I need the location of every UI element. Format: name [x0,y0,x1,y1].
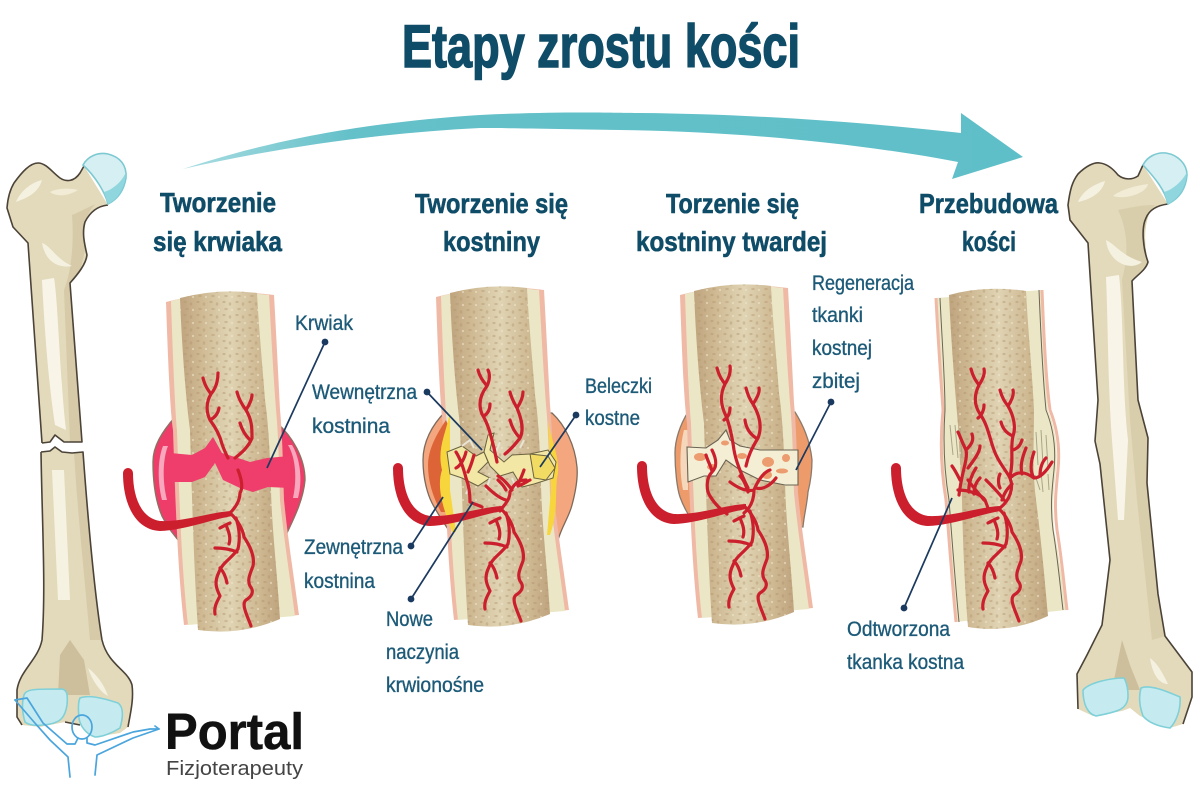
heading: stage 2 [415,188,568,257]
bone shaft [680,284,813,625]
leader: Wewnętrzna kostnina [424,389,482,450]
blood vessels [706,366,776,514]
lower vessels [891,463,1021,621]
panel: stage 4 remodeling [891,289,1067,629]
left condyle cap [1083,678,1128,716]
label: Regeneracja tkanki kostnej zbitej [812,272,914,393]
lower vessels [123,468,253,626]
label: Zewnętrzna kostnina [304,536,403,593]
heading: stage 2: Tworzenie się [415,188,568,219]
heading: stage 4: kości [962,226,1016,257]
blood vessels [203,373,252,513]
leader: Beleczki kostne [540,412,579,467]
logo figure icon [15,698,159,777]
blood vessels [456,370,530,511]
label: Krwiak: Krwiak [295,312,353,335]
leader: Zewnętrzna kostnina [408,497,443,549]
label: Beleczki kostne [585,375,652,430]
panel: stage 2 soft callus [393,286,577,627]
label: Nowe naczynia krwionośne: Nowe [386,608,433,631]
arrow: healing progression [183,112,1023,179]
heading: stage 4: Przebudowa [919,188,1058,219]
label: Zewnętrzna kostnina: Zewnętrzna [304,536,403,559]
callus bulge [423,412,577,540]
blood vessels [952,369,1052,510]
right condyle cap [78,697,122,737]
shaft and head [1068,163,1192,728]
bone shaft [436,286,569,627]
hematoma bulge [153,417,305,545]
femoral head cap [83,153,126,204]
upper fragment [7,163,108,443]
left femur: fractured bone [7,153,133,737]
panel: stage 3 hard callus [637,284,813,625]
heading: stage 3 [636,188,827,257]
periosteum outlines [936,290,1067,622]
leader: Nowe naczynia krwionośne [408,502,473,602]
heading: stage 1: się krwiaka [153,226,282,257]
logo subtitle: Fizjoterapeuty [166,758,303,780]
remodeling hatch marks [950,425,1049,492]
lower fragment [17,447,133,737]
label: Regeneracja tkanki kostnej zbitej: tkanki [812,304,863,327]
label: Beleczki kostne: Beleczki [585,375,652,398]
leader: Odtworzona tkanka kostna [901,498,952,611]
bone shaft [936,290,1066,622]
lower vessels [637,461,767,619]
callus highlight [680,430,688,490]
bone trabeculae [447,433,556,494]
right femur: healed bone [1068,153,1192,728]
right condyle cap [1140,687,1180,728]
logo wordmark: Portal [165,703,304,760]
label: Nowe naczynia krwionośne [386,608,484,697]
panel: stage 1 hematoma [123,291,305,632]
label: Nowe naczynia krwionośne: naczynia [386,641,459,664]
label: Regeneracja tkanki kostnej zbitej: kostnej [812,337,872,360]
label: Zewnętrzna kostnina: kostnina [304,570,375,593]
label: Regeneracja tkanki kostnej zbitej: Regeneracja [812,272,914,295]
bone shaft [166,291,299,632]
callus bulge [675,412,812,527]
heading: stage 1: Tworzenie [160,187,276,218]
label: Wewnętrzna kostnina [312,381,417,438]
logo: Portal Fizjoterapeuty [15,698,304,780]
label: Regeneracja tkanki kostnej zbitej: zbitej [812,370,860,393]
fracture blood clot [170,437,290,492]
femoral head cap [1143,153,1187,204]
label: Odtworzona tkanka kostna [847,618,964,674]
label: Odtworzona tkanka kostna: tkanka kostna [847,651,964,674]
heading: stage 3: kostniny twardej [636,226,827,257]
heading: stage 2: kostniny [443,226,540,257]
leader: Krwiak [267,339,328,468]
heading: stage 4 [919,188,1058,257]
label: Nowe naczynia krwionośne: krwionośne [386,674,484,697]
heading: stage 3: Torzenie się [666,188,799,219]
heading: stage 1 [153,187,282,257]
label: Odtworzona tkanka kostna: Odtworzona [847,618,950,641]
callus layers [428,417,558,535]
title: Etapy zrostu kości [402,13,800,80]
bony callus with spots [687,430,798,485]
left condyle cap [23,689,67,725]
lower vessels [393,463,523,621]
leader: Regeneracja tkanki [796,399,834,470]
label: Wewnętrzna kostnina: Wewnętrzna [312,381,417,404]
label: Wewnętrzna kostnina: kostnina [312,415,390,438]
label: Beleczki kostne: kostne [585,407,640,430]
